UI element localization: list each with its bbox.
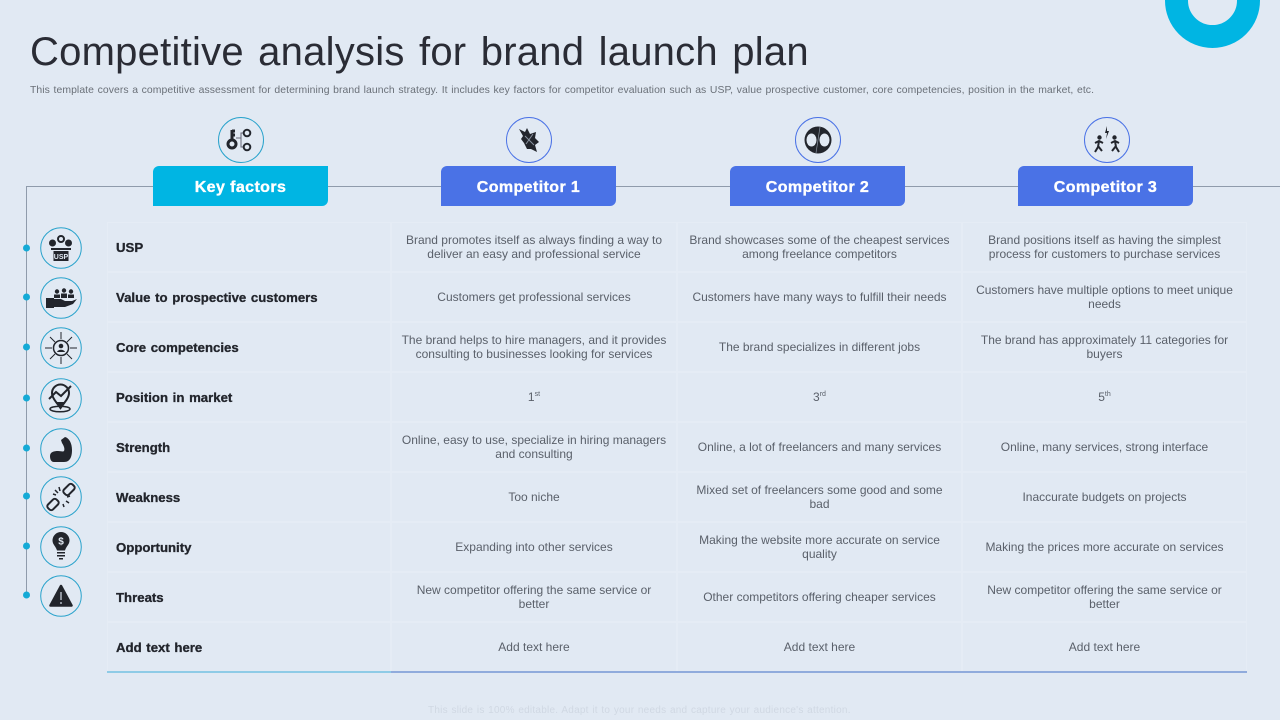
icon: dollar light bulb [40, 526, 82, 568]
subtitle: This template covers a competitive assessment for determining brand launch strategy. It includes key factors for competitor evaluation such as USP, value prospective customer, core competencies, position in the market, etc. [30, 85, 1094, 96]
comparison table: Too niche [508, 490, 560, 504]
icon: position in market [40, 378, 82, 420]
icon: mask [795, 117, 841, 163]
footer note: This slide is 100% editable. Adapt it to your needs and capture your audience's attention. [428, 705, 851, 716]
comparison table: New competitor offering the same service or better [987, 583, 1222, 611]
header: competitor 2 [730, 166, 905, 206]
comparison table: Other competitors offering cheaper services [703, 590, 936, 604]
comparison table: Customers have many ways to fulfill their needs [692, 290, 947, 304]
header: key factors [153, 166, 328, 206]
comparison table: Add text here [1069, 640, 1140, 654]
comparison table: The brand helps to hire managers, and it provides consulting to businesses looking for services [402, 333, 666, 361]
row: threats: Threats [116, 590, 164, 604]
comparison table: 1st [528, 390, 540, 404]
header: key factors: Key factors [195, 179, 286, 196]
icon: warning triangle [40, 575, 82, 617]
header: competitor 3: Competitor 3 [1054, 179, 1157, 196]
comparison table: Inaccurate budgets on projects [1022, 490, 1187, 504]
row: opportunity: Opportunity [116, 540, 191, 554]
icon: leaf burst [506, 117, 552, 163]
comparison table: Making the prices more accurate on services [985, 540, 1224, 554]
row: weakness: Weakness [116, 490, 180, 504]
row: strength: Strength [116, 440, 170, 454]
row: value [107, 272, 391, 322]
header: competitor 3 [1018, 166, 1193, 206]
icon: two people with lightning [1084, 117, 1130, 163]
header: competitor 2: Competitor 2 [766, 179, 869, 196]
row: core competencies: Core competencies [116, 340, 239, 354]
row: add text [107, 622, 391, 672]
comparison table: Online, easy to use, specialize in hiring managers and consulting [402, 433, 666, 461]
comparison table: New competitor offering the same service or better [417, 583, 651, 611]
row: add text: Add text here [116, 640, 202, 654]
row: threats [107, 572, 391, 622]
icon: flexed arm [40, 428, 82, 470]
comparison table: The brand specializes in different jobs [719, 340, 920, 354]
comparison table: Making the website more accurate on service quality [699, 533, 940, 561]
icon: dollar light bulb: $ [58, 536, 64, 548]
row: strength [107, 422, 391, 472]
row: opportunity [107, 522, 391, 572]
comparison table: 3rd [813, 390, 826, 404]
comparison table: Brand promotes itself as always finding a way to deliver an easy and professional service [406, 233, 662, 261]
comparison table: Online, a lot of freelancers and many services [698, 440, 941, 454]
icon: usp: USP [54, 254, 69, 261]
comparison table: Expanding into other services [455, 540, 613, 554]
header: competitor 1: Competitor 1 [477, 179, 580, 196]
comparison table: Mixed set of freelancers some good and some bad [696, 483, 943, 511]
row: core competencies [107, 322, 391, 372]
row: USP: USP [116, 240, 143, 254]
comparison table: Add text here [498, 640, 570, 654]
comparison table: The brand has approximately 11 categories for buyers [981, 333, 1228, 361]
timeline connector [23, 186, 1280, 598]
icon: key and gears [218, 117, 264, 163]
row: position [107, 372, 391, 422]
comparison table: Brand showcases some of the cheapest services among freelance competitors [689, 233, 950, 261]
header: competitor 1 [441, 166, 616, 206]
row: value: Value to prospective customers [116, 290, 318, 304]
icon: hand with people [40, 277, 82, 319]
row: weakness [107, 472, 391, 522]
row: position: Position in market [116, 390, 232, 404]
icon: broken chain [40, 476, 82, 518]
comparison table: Online, many services, strong interface [1001, 440, 1208, 454]
comparison table: Add text here [784, 640, 855, 654]
row: USP [107, 222, 391, 272]
comparison table: 5th [1098, 390, 1111, 404]
title: Competitive analysis for brand launch plan [30, 30, 809, 74]
decorative donut [1165, 0, 1260, 48]
table bottom rule [107, 671, 1247, 673]
icon: core competencies [40, 327, 82, 369]
comparison table: Customers get professional services [437, 290, 631, 304]
comparison table: Customers have multiple options to meet unique needs [976, 283, 1233, 311]
icon: usp [40, 227, 82, 269]
comparison table: Brand positions itself as having the simplest process for customers to purchase services [988, 233, 1221, 261]
